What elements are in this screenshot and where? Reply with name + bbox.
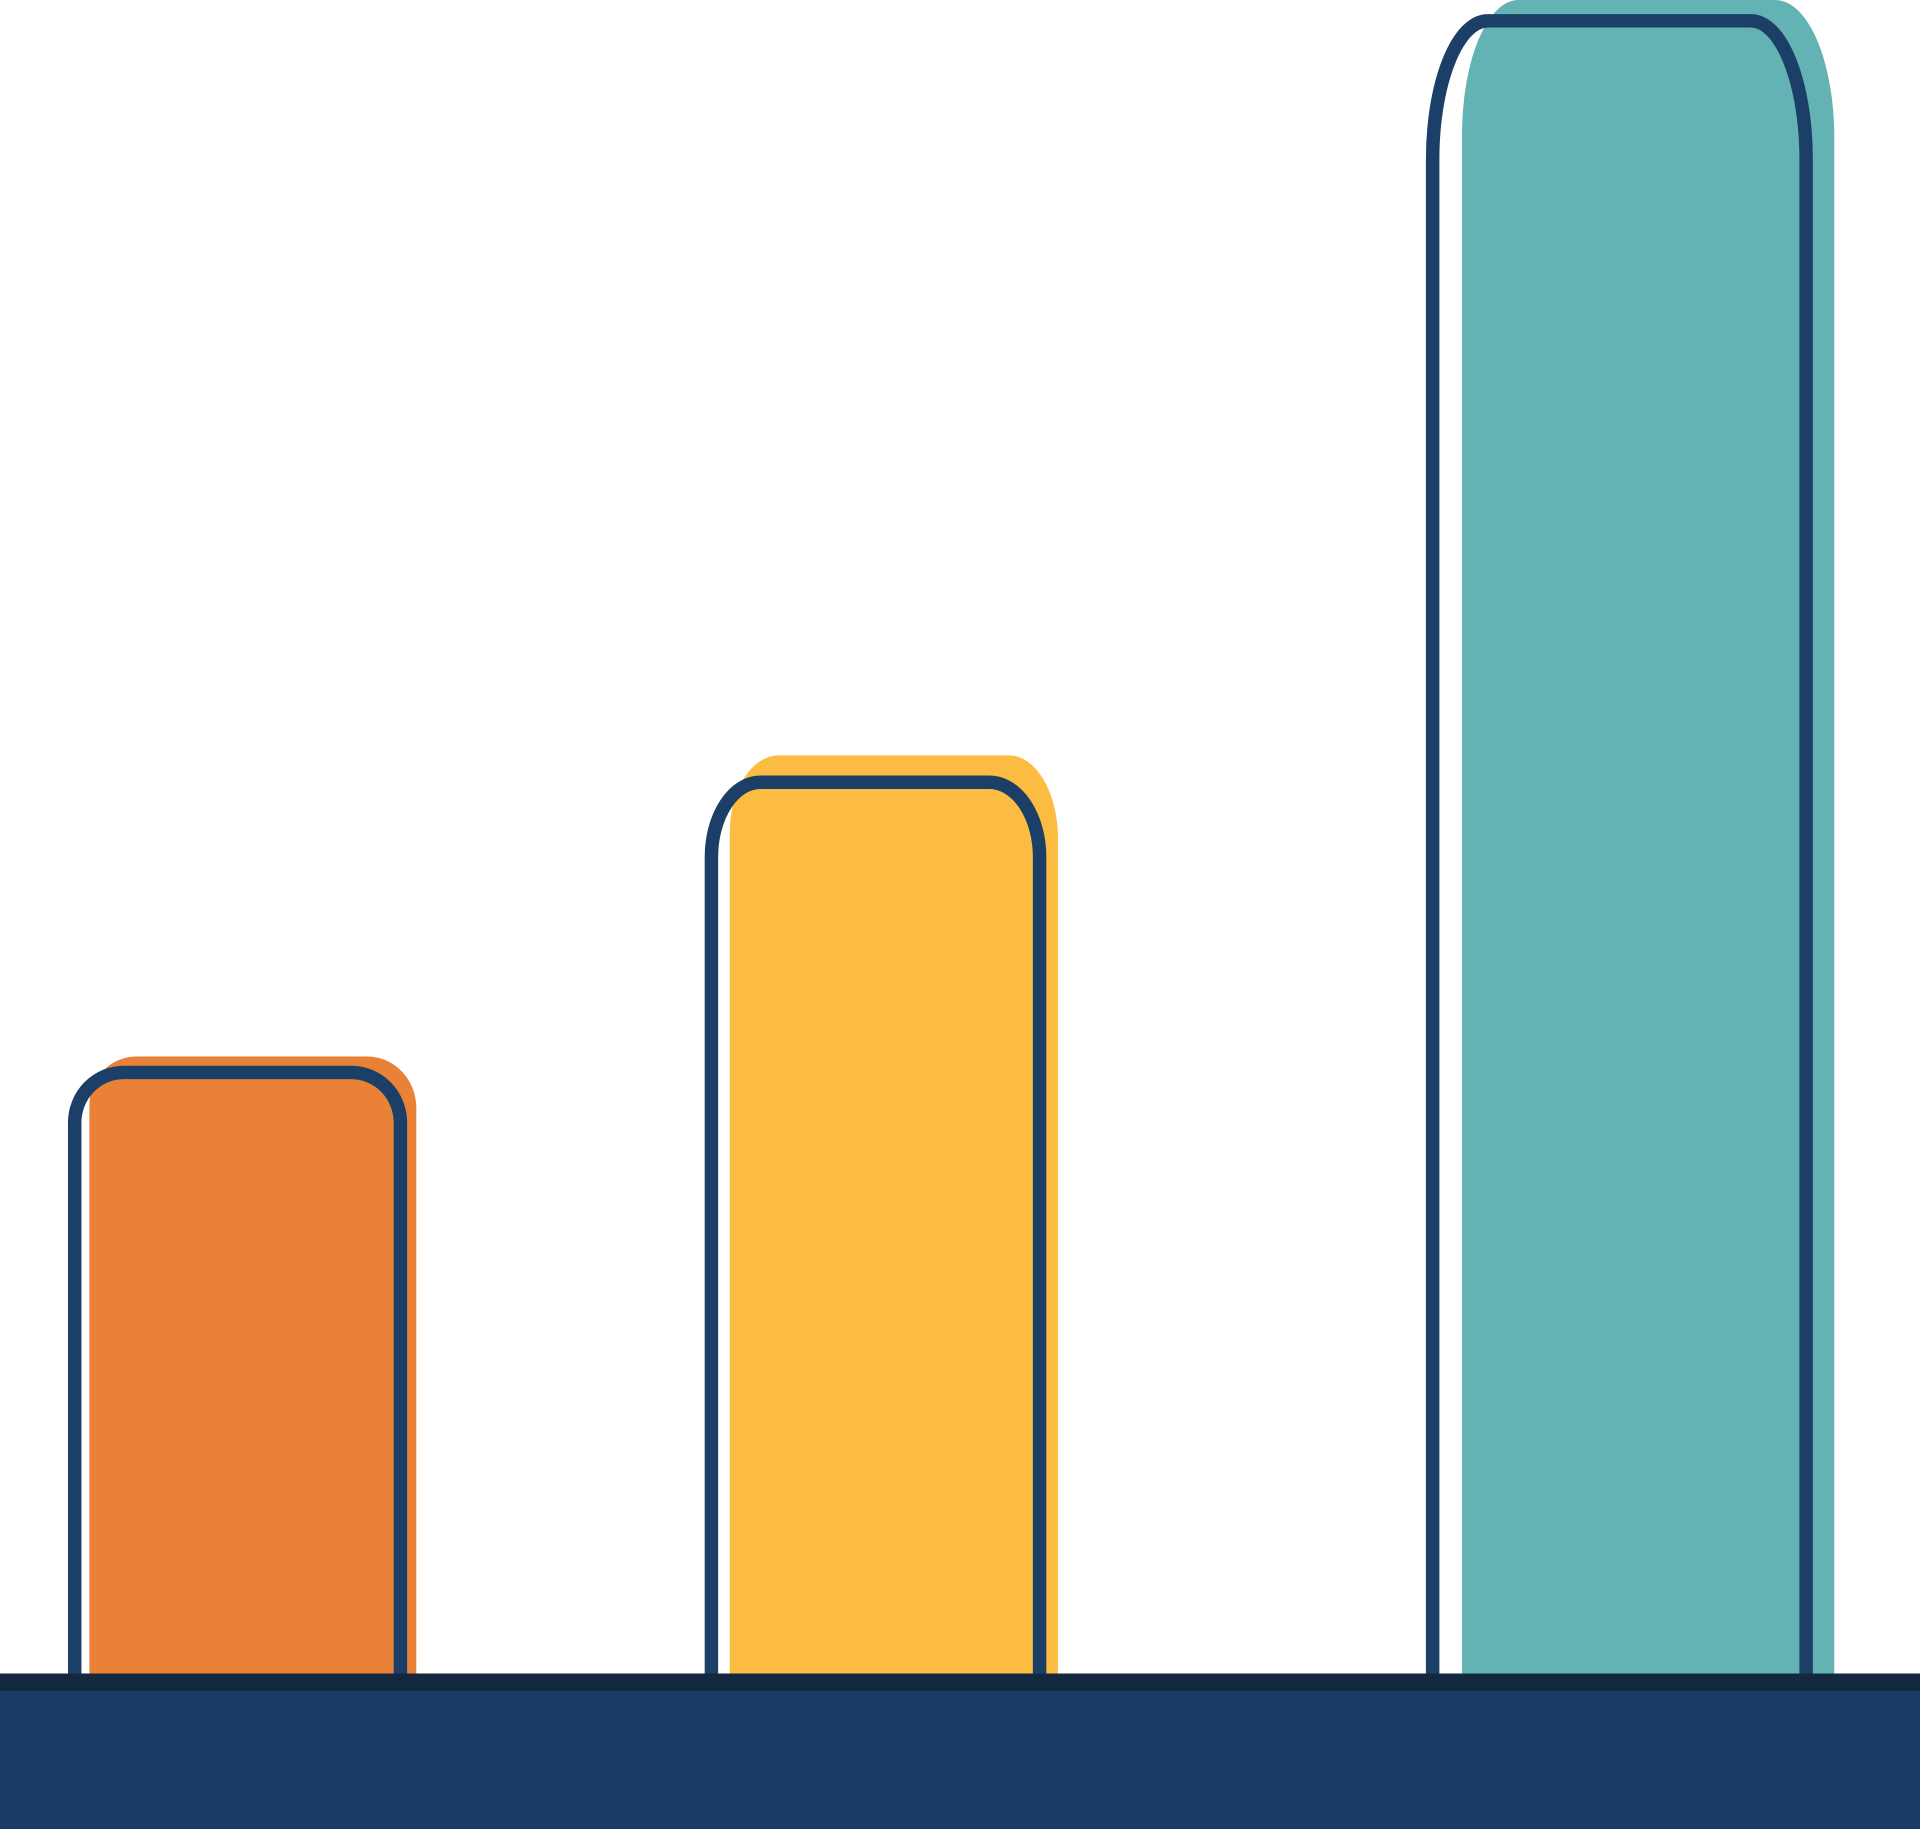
bar: teal (tall) [1433,0,1834,1677]
baseline platform [0,1674,1920,1829]
bar: yellow (medium) [711,755,1058,1677]
bar: orange (short) [75,1057,416,1677]
